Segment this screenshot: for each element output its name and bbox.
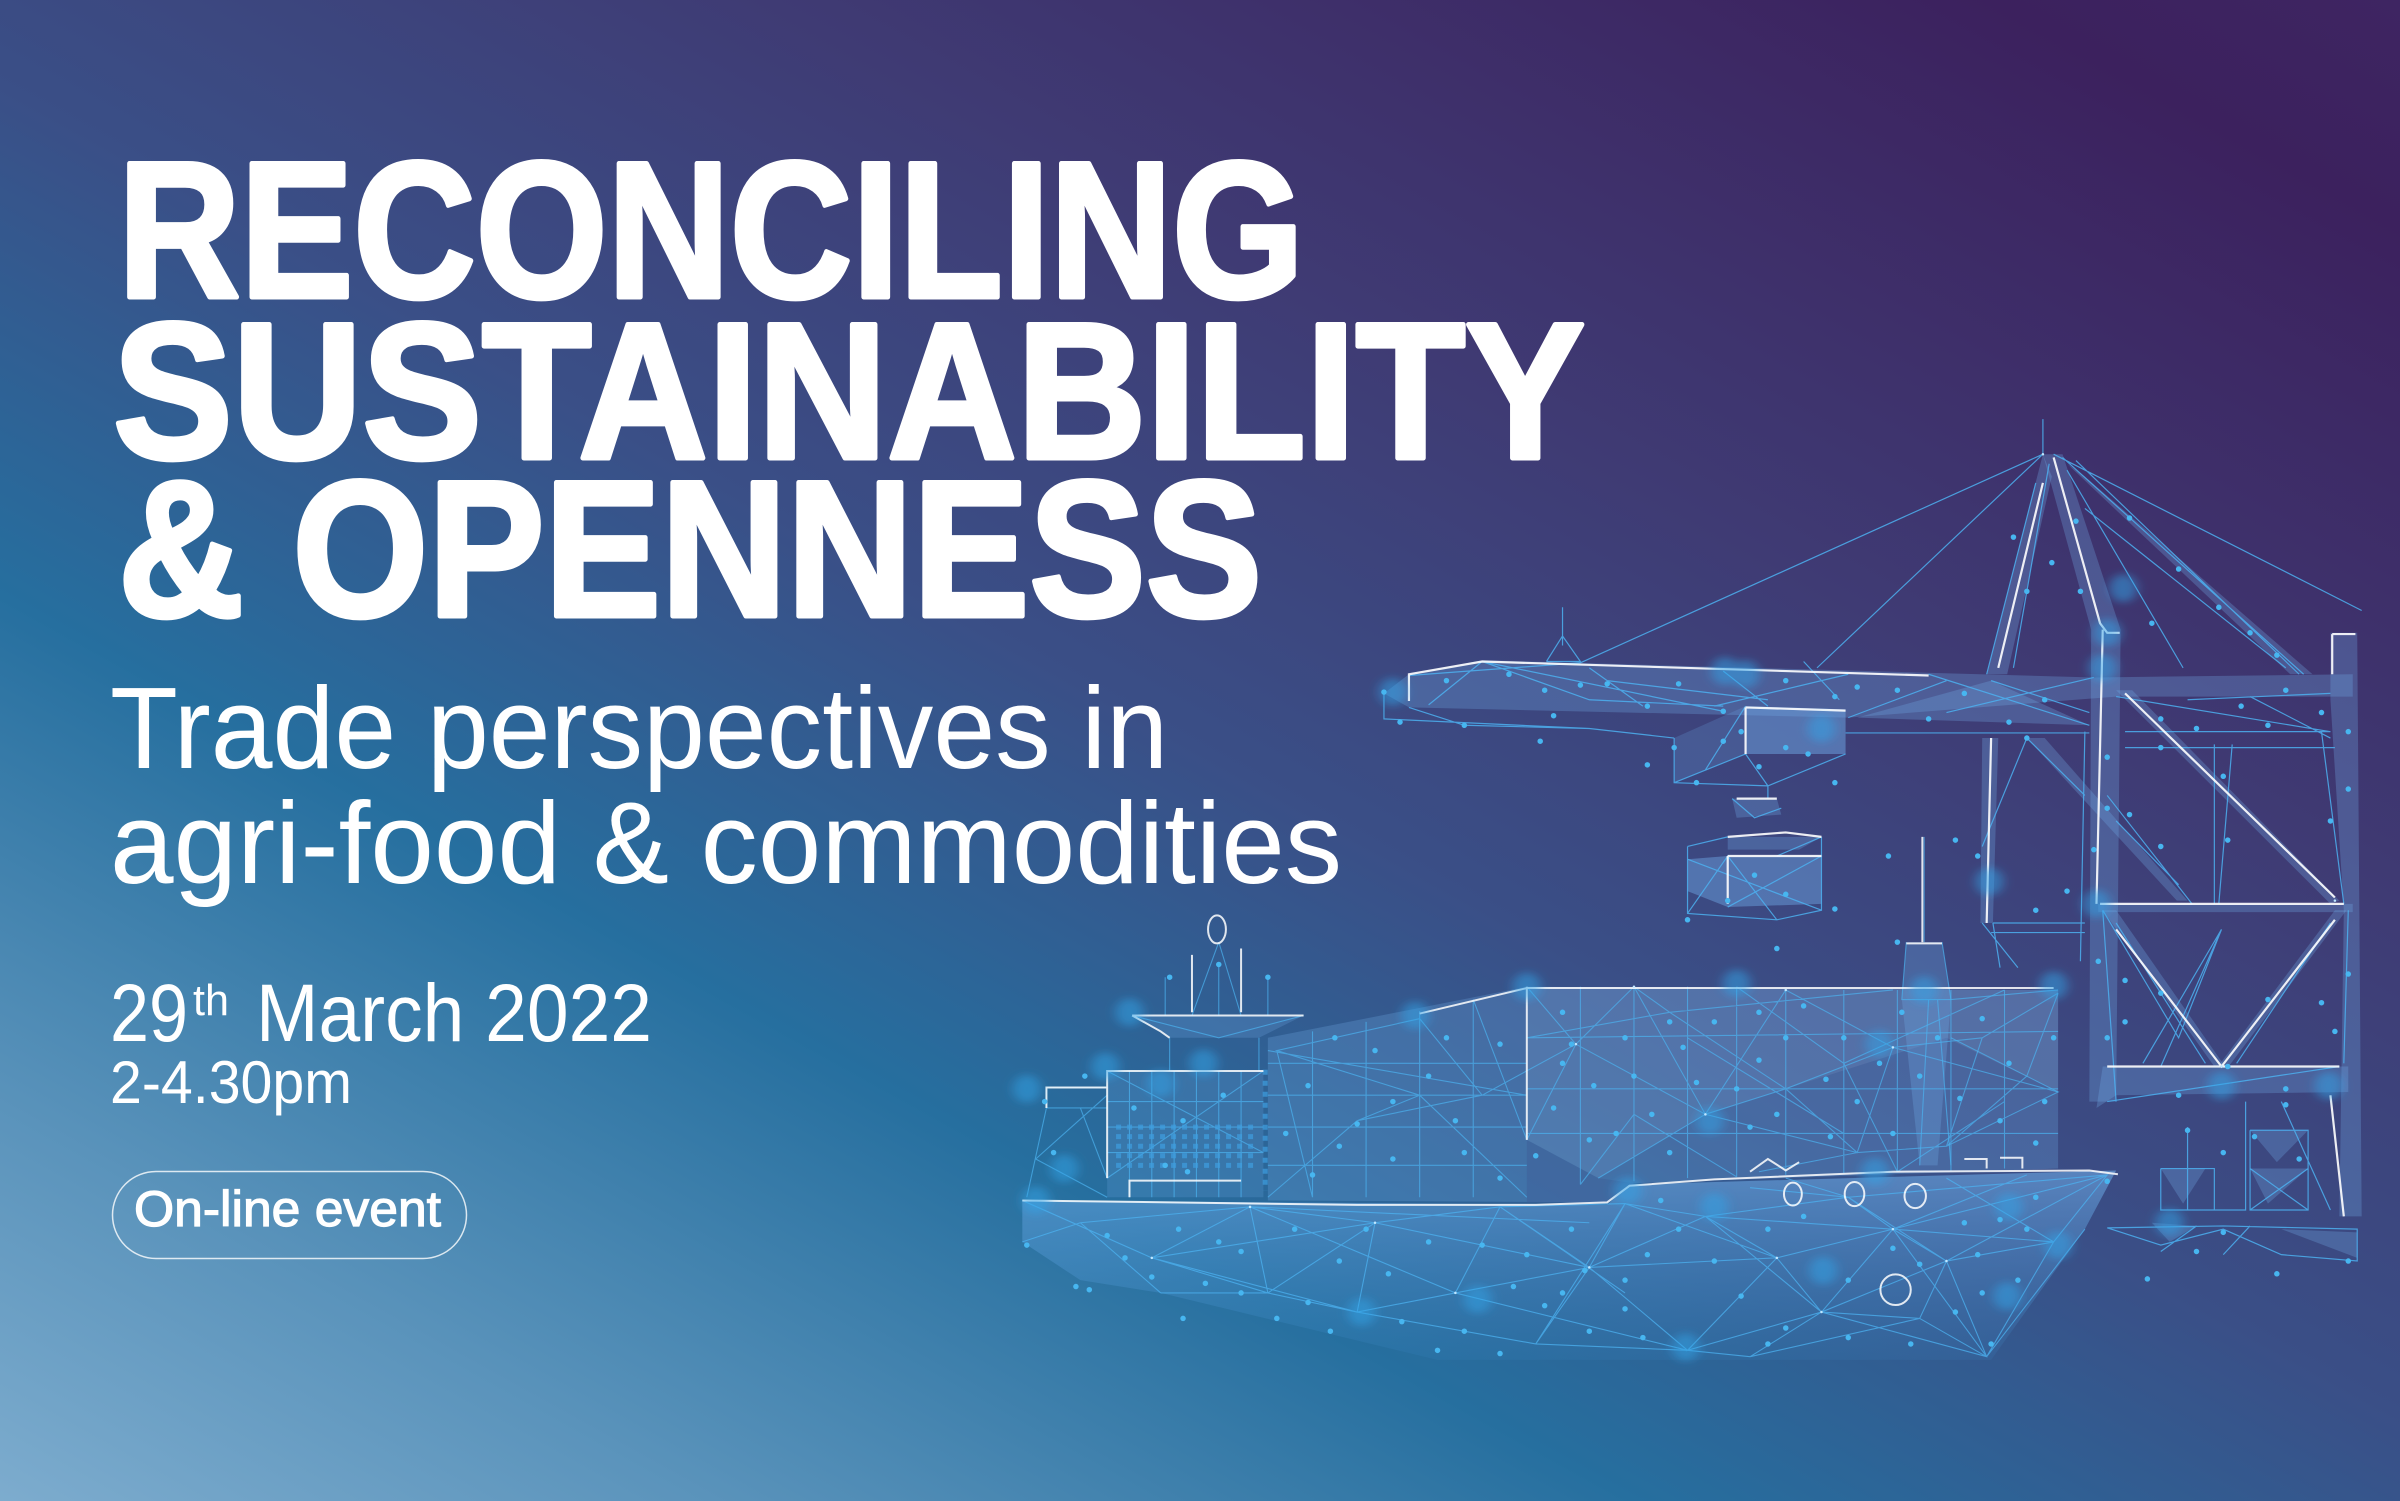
ship fills (1022, 1170, 2116, 1360)
subtitle: Trade perspectives in (110, 663, 1168, 793)
superstructure window pattern (1116, 1070, 1265, 1191)
event date and time: 2-4.30pm (110, 1049, 352, 1116)
illustration: low-poly ship and port crane (1022, 419, 2362, 1360)
on-line event pill: On-line event (134, 1181, 441, 1237)
ship highlights (1022, 837, 2118, 1205)
subtitle: agri-food & commodities (110, 778, 1342, 908)
crane (1384, 419, 2362, 1261)
event date and time: March 2022 (256, 968, 652, 1059)
network point nodes (1384, 518, 2348, 1279)
network glow nodes (1027, 588, 2329, 1347)
event date and time: 29 (110, 968, 188, 1059)
ship wireframe (1268, 987, 2058, 1197)
crane structure fills (1384, 454, 2362, 1258)
crane highlights (1409, 457, 2355, 1216)
title: SUSTAINABILITY (113, 283, 1585, 500)
title: & OPENNESS (118, 441, 1262, 658)
title (113, 122, 1585, 658)
event date and time (110, 968, 652, 1116)
portholes (1208, 915, 1926, 1305)
ship (1022, 837, 2118, 1360)
subtitle (110, 663, 1342, 908)
crane wireframe (1384, 419, 2362, 1261)
on-line event pill (112, 1172, 466, 1258)
event date and time: th (193, 976, 229, 1025)
title: RECONCILING (118, 122, 1304, 339)
